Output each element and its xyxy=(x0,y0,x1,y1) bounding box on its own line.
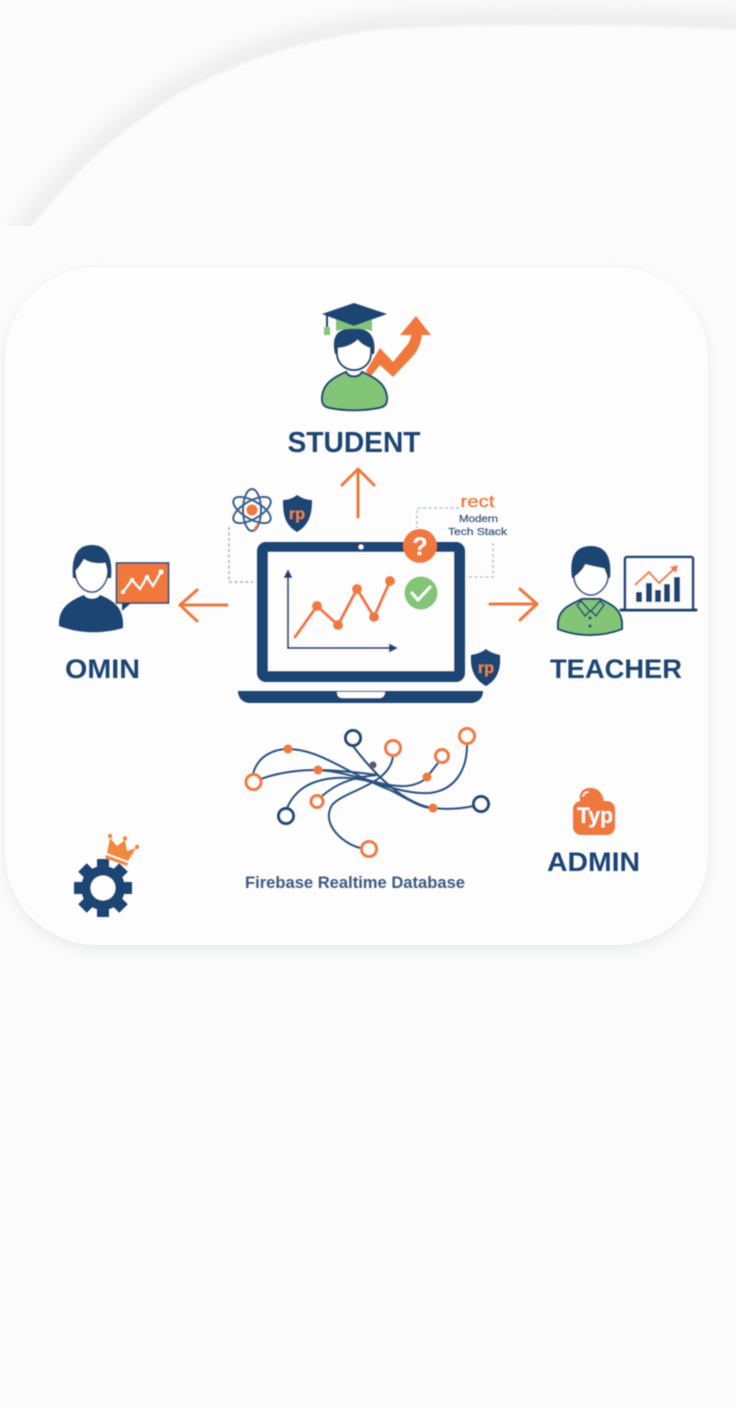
icon: typ tag: Typ xyxy=(577,803,613,828)
laptop camera xyxy=(358,544,364,550)
student figure xyxy=(288,303,431,459)
icon: omin hair xyxy=(73,545,111,578)
heading: student: STUDENT xyxy=(288,427,421,459)
connector: dotted left xyxy=(229,527,253,582)
icon: student hair xyxy=(334,328,374,354)
icon: shield top xyxy=(283,495,312,532)
card shadow xyxy=(6,272,707,950)
icon: crown xyxy=(105,834,139,866)
connector: dotted right xyxy=(466,543,493,577)
icon: student face xyxy=(337,338,371,370)
icon: teacher buttons xyxy=(588,616,592,628)
icon: graduation cap xyxy=(322,303,387,326)
laptop screen frame xyxy=(257,542,465,682)
icon: question badge: ? xyxy=(412,533,428,561)
icon: omin chart panel xyxy=(116,563,168,611)
arrow: right to teacher xyxy=(490,589,537,620)
icon: shield top: rp xyxy=(289,506,305,523)
network junctions xyxy=(284,744,438,812)
icon: teacher shirt xyxy=(558,599,622,635)
icon: shield laptop xyxy=(471,649,500,686)
label: tech stack: Tech Stack xyxy=(448,526,508,538)
icon: question badge xyxy=(403,529,437,563)
arrow: left to omin xyxy=(180,590,227,621)
icon: check badge xyxy=(404,576,438,610)
laptop notch xyxy=(337,692,385,698)
background lighter band xyxy=(0,225,736,978)
background top panel with swoosh xyxy=(14,10,736,226)
icon: tassel xyxy=(324,315,330,335)
connector: dotted top xyxy=(417,508,459,528)
laptop screen xyxy=(268,552,454,671)
tech stack label xyxy=(448,492,508,538)
diagram content xyxy=(59,303,696,917)
heading: teacher: TEACHER xyxy=(550,654,682,684)
label: rect: rect xyxy=(460,492,495,511)
icon: gear xyxy=(74,859,132,917)
icon: cap band xyxy=(336,318,372,331)
network lines xyxy=(253,745,473,848)
icon: atom xyxy=(229,489,275,531)
network nodes xyxy=(246,728,488,856)
laptop base xyxy=(238,691,483,703)
icon: teacher face xyxy=(574,563,608,595)
icon: crown gear xyxy=(74,834,139,917)
icon: teacher monitor xyxy=(621,557,696,610)
icon: teacher collar xyxy=(577,601,604,616)
panel: main card xyxy=(5,267,708,945)
icon: omin face xyxy=(75,558,108,592)
chart line xyxy=(295,576,395,637)
database network xyxy=(245,728,488,892)
teacher figure xyxy=(550,546,696,684)
arrow: up to student xyxy=(342,469,374,517)
chart axes xyxy=(284,569,398,652)
admin block xyxy=(547,788,640,877)
label: modern: Modern xyxy=(459,513,498,525)
heading: admin: ADMIN xyxy=(547,847,640,877)
label: firebase realtime database: Firebase Realtime Database xyxy=(245,874,465,892)
laptop xyxy=(238,529,483,703)
heading: omin: OMIN xyxy=(65,654,140,684)
omin figure xyxy=(59,545,168,684)
icon: shield laptop: rp xyxy=(478,660,494,677)
icon: omin shoulders xyxy=(59,595,123,632)
icon: student shoulders xyxy=(322,372,387,410)
icon: growth arrow xyxy=(366,316,431,377)
icon: teacher hair xyxy=(571,546,610,578)
